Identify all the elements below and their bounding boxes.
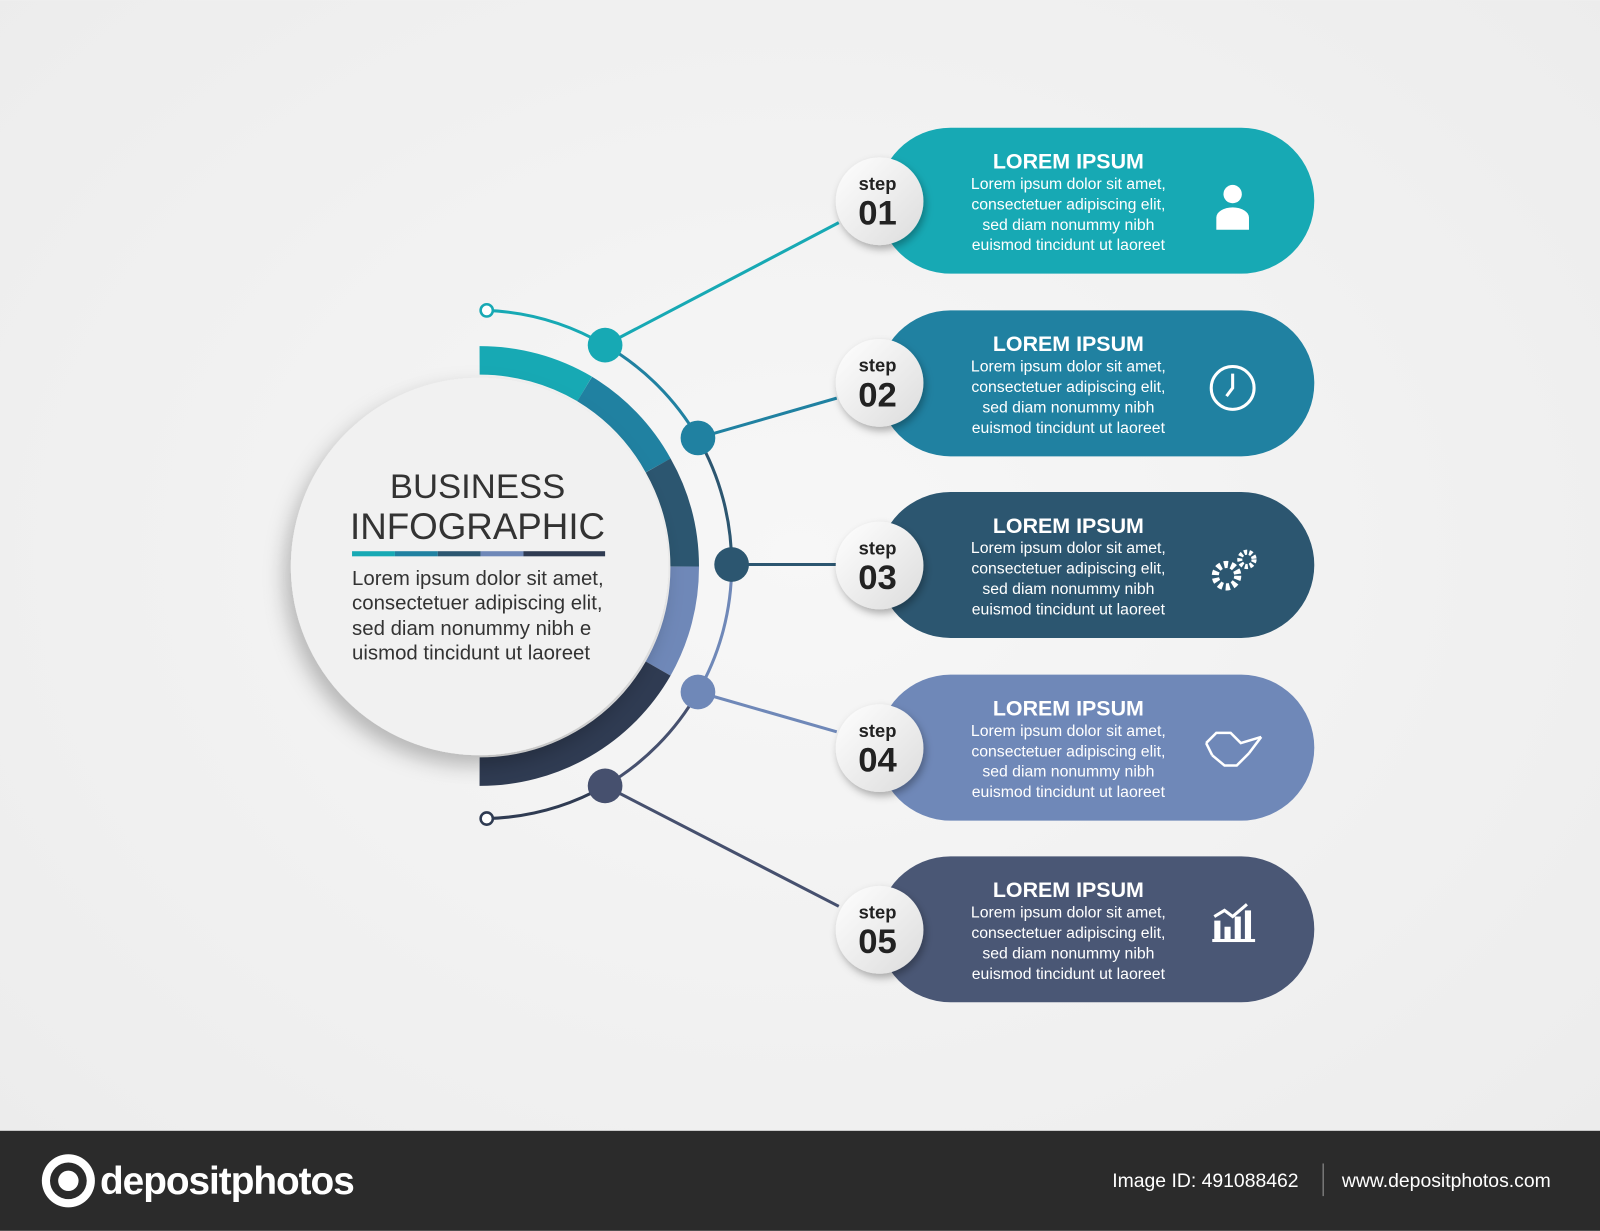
center circle: Lorem ipsum dolor sit amet, xyxy=(352,568,604,590)
pill 2: Lorem ipsum dolor sit amet, xyxy=(971,359,1166,376)
thin arc connectors xyxy=(487,223,839,906)
pill 1: LOREM IPSUM xyxy=(993,150,1144,174)
pill 2: LOREM IPSUM xyxy=(993,332,1144,356)
center circle: BUSINESS xyxy=(390,468,565,506)
step badges: 05 xyxy=(858,923,897,961)
pill 3: consectetuer adipiscing elit, xyxy=(971,561,1165,578)
pill 5: sed diam nonummy nibh xyxy=(982,945,1154,962)
pill 2: sed diam nonummy nibh xyxy=(982,399,1154,416)
step badges: 03 xyxy=(858,559,897,597)
pill 2: consectetuer adipiscing elit, xyxy=(971,379,1165,396)
pill 1: Lorem ipsum dolor sit amet, xyxy=(971,176,1166,193)
pill 5: euismod tincidunt ut laoreet xyxy=(972,966,1166,983)
pill 3: LOREM IPSUM xyxy=(993,514,1144,538)
pill 3: euismod tincidunt ut laoreet xyxy=(972,601,1166,618)
pill 5 xyxy=(878,856,1314,1002)
step badges: 01 xyxy=(858,195,897,233)
center circle: consectetuer adipiscing elit, xyxy=(352,592,603,614)
pill 4: Lorem ipsum dolor sit amet, xyxy=(971,723,1166,740)
step badges: step xyxy=(859,902,896,923)
pill 4: consectetuer adipiscing elit, xyxy=(971,743,1165,760)
step badges xyxy=(836,157,923,974)
step badges: step xyxy=(859,173,896,194)
pill 3: sed diam nonummy nibh xyxy=(982,581,1154,598)
step badges: step xyxy=(859,720,896,741)
ring segments xyxy=(480,360,685,772)
pill 5: LOREM IPSUM xyxy=(993,878,1144,902)
center circle: sed diam nonummy nibh e xyxy=(352,618,591,640)
pill 1: consectetuer adipiscing elit, xyxy=(971,196,1165,213)
center circle xyxy=(291,378,668,755)
footer: www.depositphotos.com xyxy=(1341,1170,1551,1192)
center circle: uismod tincidunt ut laoreet xyxy=(352,642,590,664)
pill 4: LOREM IPSUM xyxy=(993,697,1144,721)
center circle: INFOGRAPHIC xyxy=(350,506,605,547)
footer: depositphotos xyxy=(100,1160,354,1203)
pill 3 xyxy=(878,492,1314,638)
pill 4: sed diam nonummy nibh xyxy=(982,764,1154,781)
pill 2: euismod tincidunt ut laoreet xyxy=(972,420,1166,437)
step badges: step xyxy=(859,537,896,558)
pill 3: Lorem ipsum dolor sit amet, xyxy=(971,540,1166,557)
step badges: step xyxy=(859,355,896,376)
footer: Image ID: 491088462 xyxy=(1112,1170,1299,1192)
step badges: 02 xyxy=(858,376,897,414)
pill 4: euismod tincidunt ut laoreet xyxy=(972,784,1166,801)
pill 2 xyxy=(878,310,1314,456)
pill 1 xyxy=(878,128,1314,274)
pill 5: Lorem ipsum dolor sit amet, xyxy=(971,905,1166,922)
pill 5: consectetuer adipiscing elit, xyxy=(971,925,1165,942)
step badges: 04 xyxy=(858,742,898,780)
pill 1: sed diam nonummy nibh xyxy=(982,217,1154,234)
dots xyxy=(588,328,749,803)
pill 4 xyxy=(878,675,1314,821)
pill 1: euismod tincidunt ut laoreet xyxy=(972,237,1166,254)
footer xyxy=(0,1131,1600,1231)
